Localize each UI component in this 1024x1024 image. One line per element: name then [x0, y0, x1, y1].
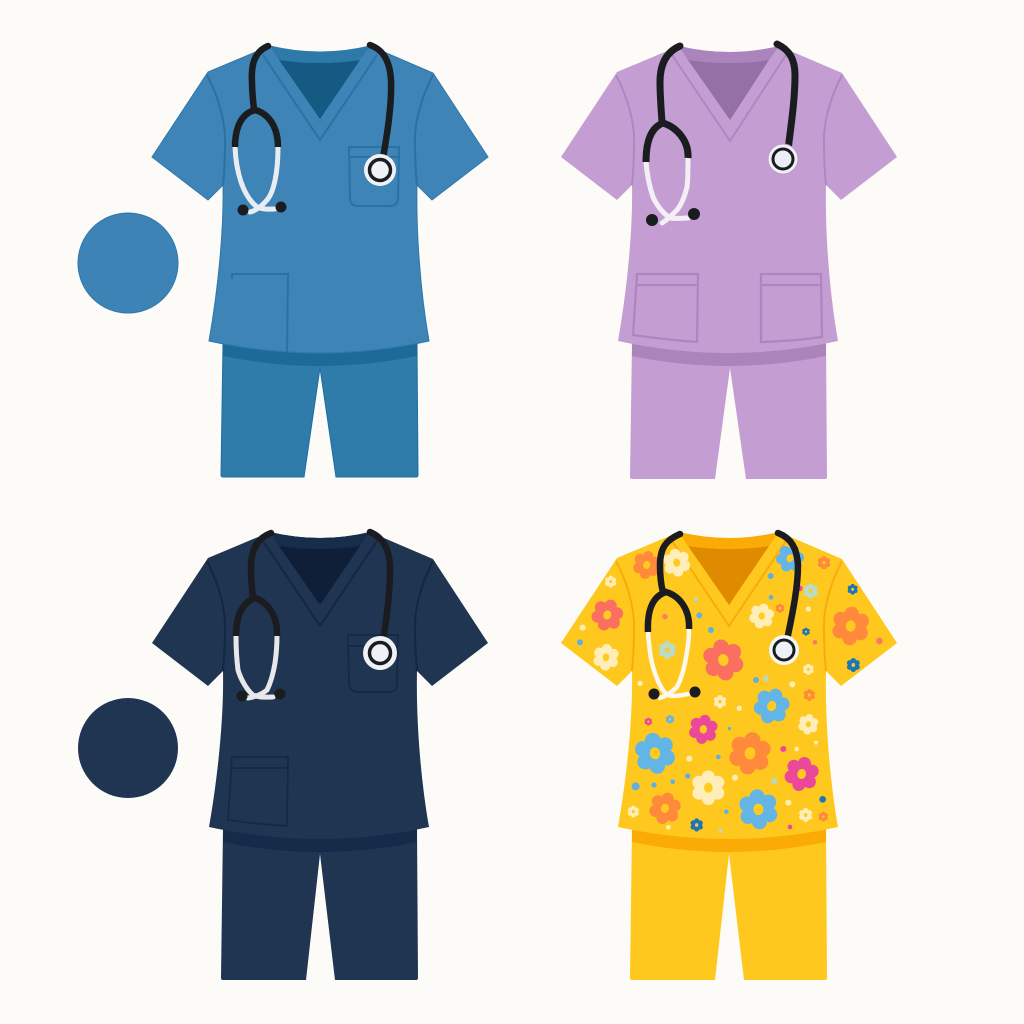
- lower pocket: [228, 757, 288, 826]
- lower pocket: [232, 274, 288, 352]
- swatch: navy: [78, 698, 178, 798]
- stethoscope: [646, 44, 798, 226]
- stethoscope: [235, 45, 396, 216]
- lavender top: [561, 46, 897, 353]
- uniform: navy scrubs: [152, 532, 488, 980]
- yellow pants: [630, 829, 827, 980]
- chest pocket: [348, 635, 398, 692]
- lavender pants: [630, 343, 827, 479]
- uniform: lavender scrubs: [561, 44, 897, 479]
- navy top: [152, 532, 488, 839]
- stethoscope: [236, 532, 397, 702]
- navy pants: [221, 829, 418, 980]
- right pocket: [761, 274, 822, 342]
- left pocket: [633, 274, 698, 342]
- yellow waistband: [632, 826, 826, 852]
- stethoscope: [648, 533, 799, 700]
- navy waistband: [223, 826, 417, 852]
- floral pattern: [577, 540, 883, 833]
- chest pocket: [349, 147, 399, 206]
- lavender waistband: [632, 340, 826, 366]
- blue waistband: [223, 340, 417, 366]
- blue top: [152, 46, 488, 353]
- blue pants: [221, 343, 418, 477]
- uniform: floral yellow scrubs: [561, 532, 897, 980]
- yellow top: [561, 532, 897, 839]
- uniform: blue scrubs: [152, 45, 488, 477]
- swatch: blue: [78, 213, 178, 313]
